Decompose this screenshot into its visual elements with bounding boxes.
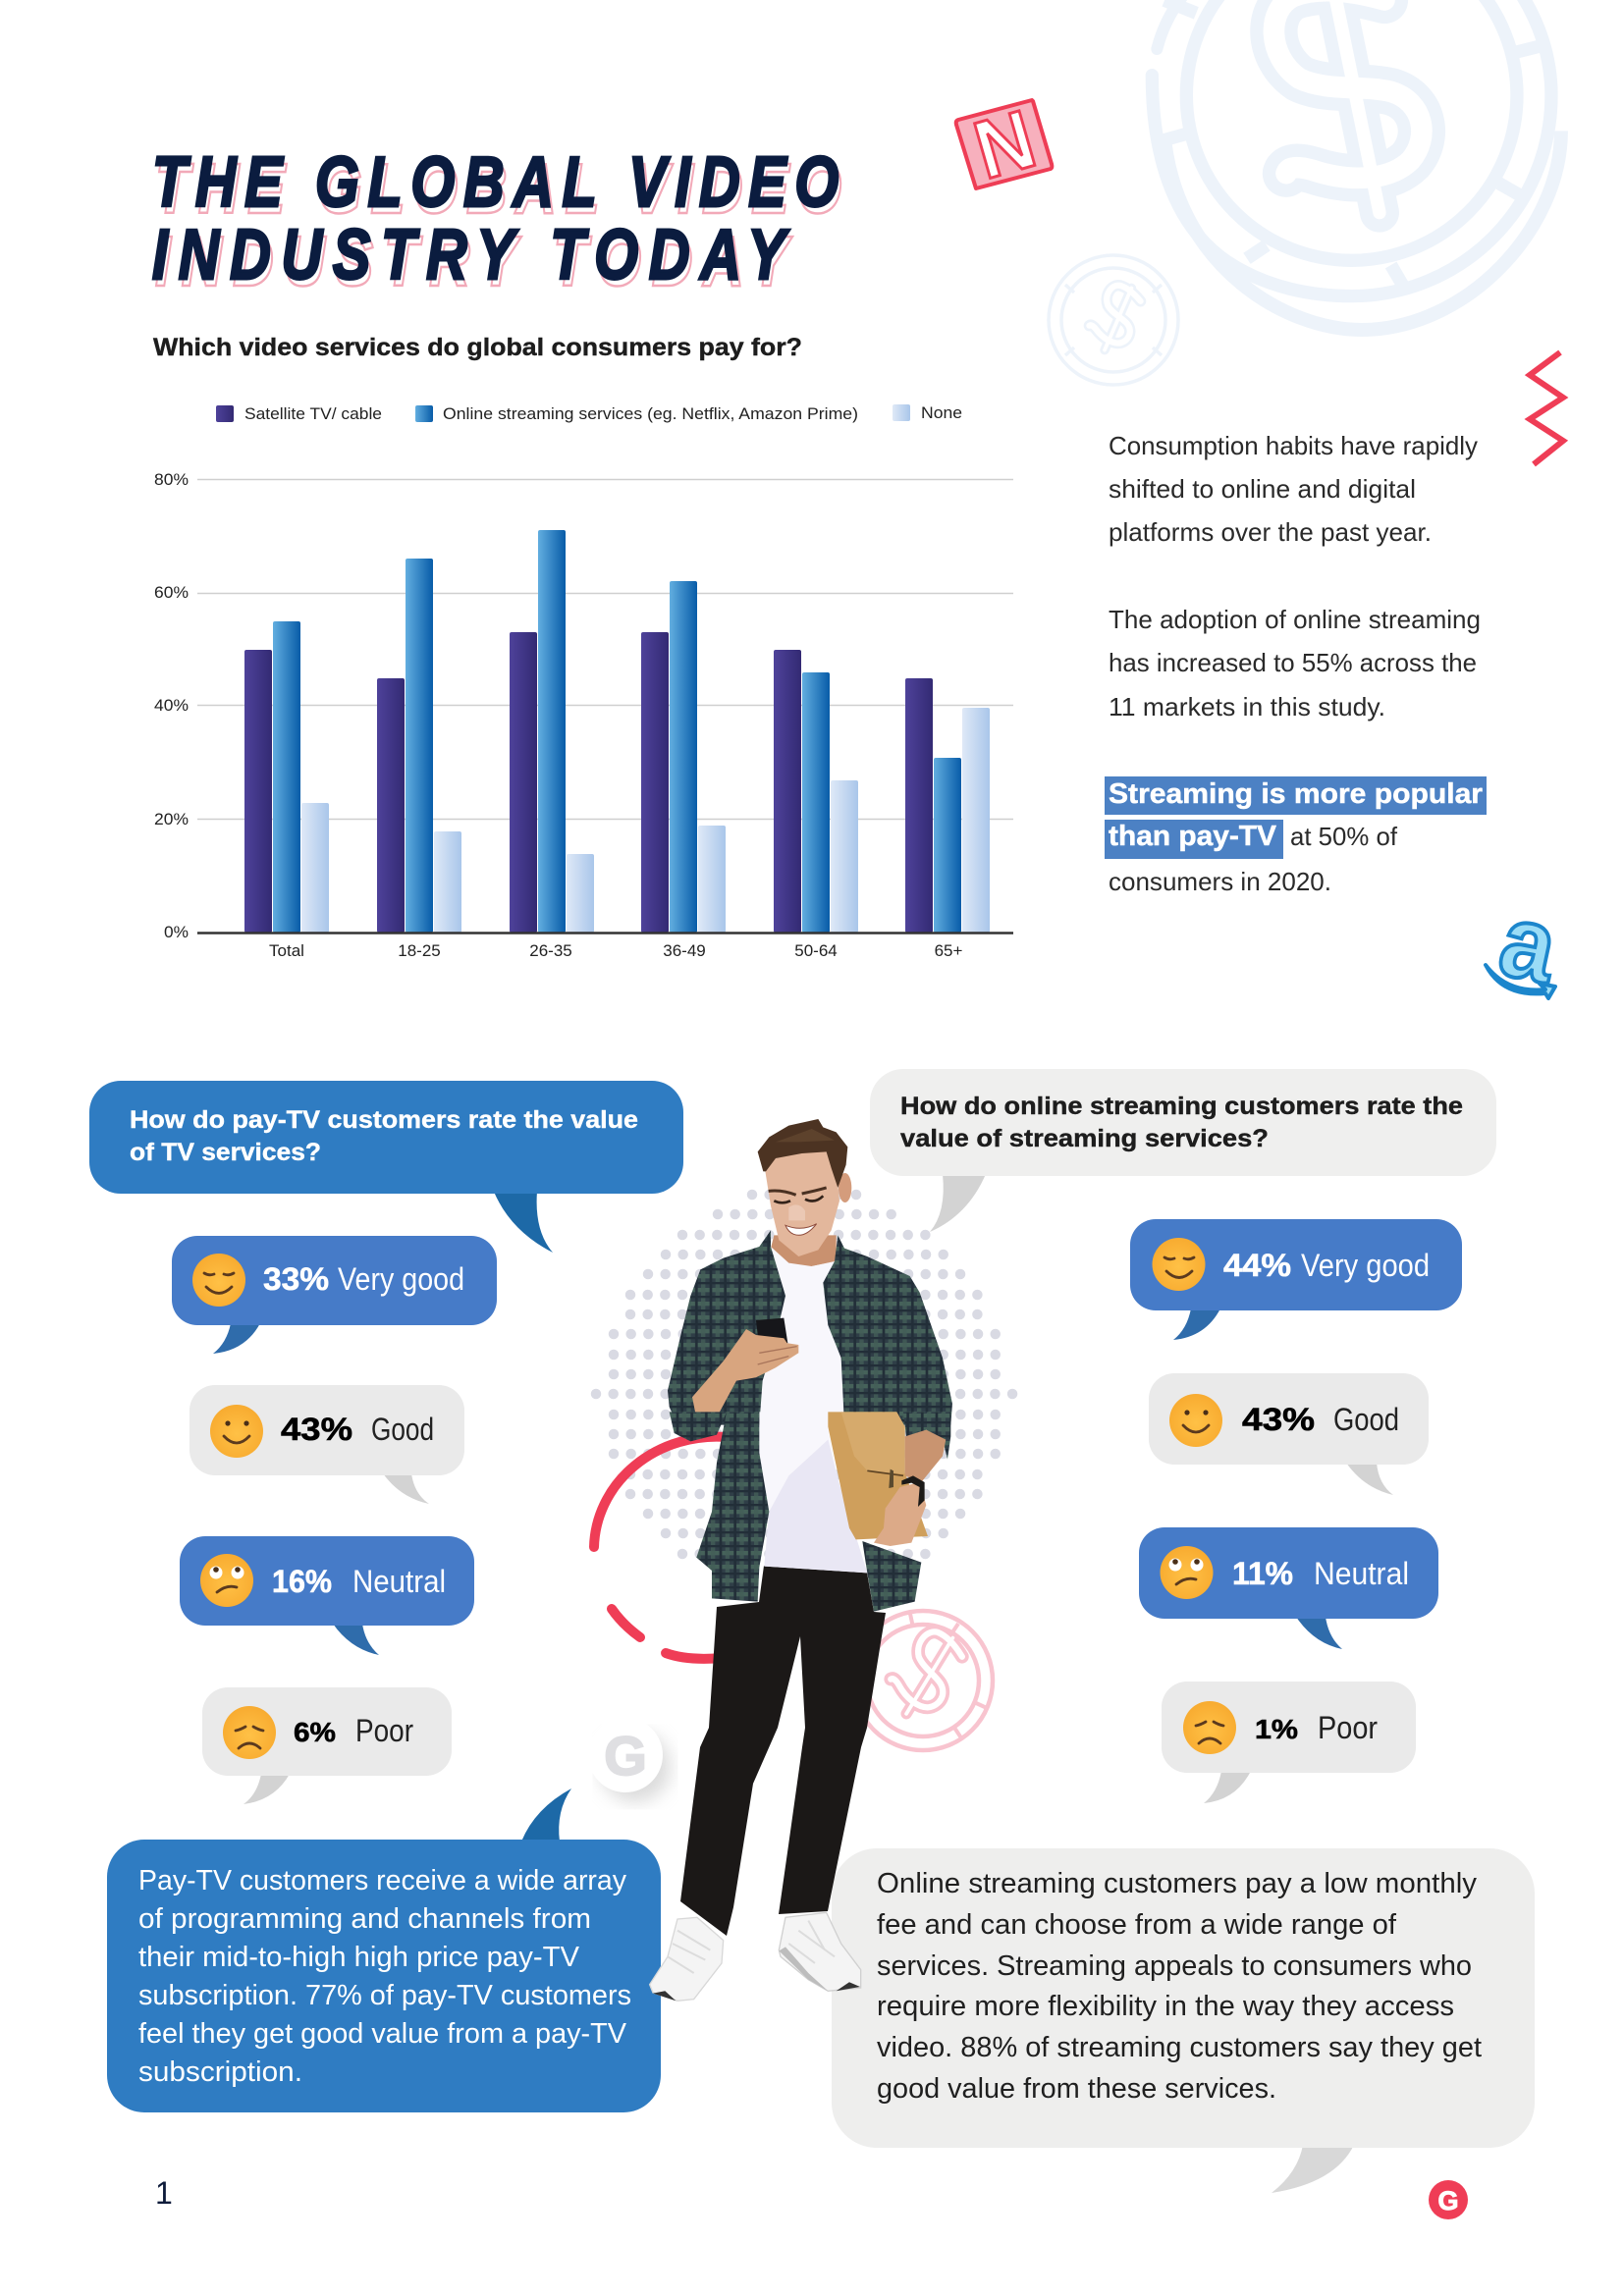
rating: streaming 44% very good: 44% xyxy=(1223,1248,1291,1283)
lower torso xyxy=(670,1412,950,1612)
bar chart: 65+ xyxy=(935,941,962,960)
t-shirt bottom xyxy=(759,1412,867,1573)
logo: red G: G xyxy=(1437,2186,1459,2216)
rating: pay-TV 43% good xyxy=(189,1385,464,1504)
rating: pay-TV 33% very good xyxy=(172,1236,497,1354)
G badge with shadow: G xyxy=(604,1725,647,1787)
bubble: streaming question: How do online streaming customers rate the xyxy=(900,1093,1463,1120)
text block: consumption habits xyxy=(1105,431,1487,896)
rating: streaming 1% poor: Poor xyxy=(1318,1710,1378,1745)
panel: streaming note: Online streaming customers pay a low monthly xyxy=(877,1868,1478,1899)
rating: pay-TV 33% very good: 33% xyxy=(263,1261,329,1297)
bubble: pay-TV question: of TV services? xyxy=(130,1139,321,1166)
rating: pay-TV 16% neutral: 16% xyxy=(272,1564,332,1599)
cuff left xyxy=(670,1412,727,1441)
panel: pay-TV note xyxy=(107,1789,661,2112)
bar chart: 0% xyxy=(164,923,189,941)
bar chart xyxy=(154,470,1013,960)
rating: pay-TV 33% very good: Very good xyxy=(338,1261,464,1297)
title: THE GLOBAL VIDEO xyxy=(152,142,839,221)
phone xyxy=(756,1318,787,1348)
panel: pay-TV note: subscription. 77% of pay-TV customers xyxy=(138,1980,631,2011)
rating: streaming 1% poor xyxy=(1162,1682,1416,1803)
legend: Satellite TV/ cable xyxy=(244,404,382,423)
panel: pay-TV note: of programming and channels from xyxy=(138,1903,591,1935)
person with phone and bag xyxy=(650,1119,952,2001)
rating: streaming 11% neutral: 11% xyxy=(1232,1556,1293,1591)
panel: pay-TV note: Pay-TV customers receive a wide array xyxy=(138,1865,626,1896)
text block: consumption habits: Streaming is more popular xyxy=(1109,778,1483,810)
title: THE GLOBAL VIDEO xyxy=(155,149,841,228)
text block: consumption habits: at 50% of xyxy=(1290,822,1398,851)
bar chart: 40% xyxy=(154,696,189,715)
icon: content emoji xyxy=(192,1254,245,1307)
legend xyxy=(216,403,962,423)
bar chart: 60% xyxy=(154,583,189,602)
rating: streaming 43% good: 43% xyxy=(1242,1402,1315,1437)
shirt right panel xyxy=(862,1541,921,1612)
text block: consumption habits: 11 markets in this study. xyxy=(1109,692,1385,721)
bar chart: 80% xyxy=(154,470,189,489)
bubble: streaming question xyxy=(870,1069,1496,1232)
rating: streaming 43% good: Good xyxy=(1333,1402,1399,1437)
rating: streaming 44% very good: Very good xyxy=(1301,1248,1430,1283)
bar chart: Total xyxy=(269,941,304,960)
rating: streaming 43% good xyxy=(1149,1373,1429,1495)
text block: consumption habits: The adoption of online streaming xyxy=(1109,605,1481,634)
icon: smile emoji xyxy=(210,1405,263,1458)
panel: pay-TV note: feel they get good value from a pay-TV xyxy=(138,2018,627,2050)
G badge with shadow xyxy=(588,1718,671,1802)
rating: pay-TV 6% poor: Poor xyxy=(355,1713,413,1748)
text block: consumption habits: shifted to online and digital xyxy=(1109,474,1416,504)
rating: streaming 11% neutral xyxy=(1139,1527,1438,1649)
panel: streaming note: fee and can choose from a wide range of xyxy=(877,1909,1397,1941)
panel: streaming note xyxy=(832,1848,1535,2193)
text block: consumption habits: consumers in 2020. xyxy=(1109,867,1331,896)
panel: pay-TV note: their mid-to-high high price pay-TV xyxy=(138,1942,580,1973)
hand right xyxy=(874,1482,926,1546)
red dashed circle xyxy=(594,1437,727,1659)
rating: streaming 1% poor: 1% xyxy=(1255,1714,1298,1744)
icon: Amazon: a xyxy=(1490,882,1568,1006)
rating: streaming 44% very good xyxy=(1130,1219,1462,1340)
bar chart: 26-35 xyxy=(529,941,572,960)
right sleeve xyxy=(903,1412,950,1460)
rating: pay-TV 43% good: Good xyxy=(371,1412,434,1447)
decorative coin top right xyxy=(1152,0,1561,330)
icon: sad emoji xyxy=(223,1706,276,1759)
logo: red G xyxy=(1429,2180,1468,2219)
bar chart: 36-49 xyxy=(663,941,706,960)
text block: consumption habits: has increased to 55% across the xyxy=(1109,648,1477,677)
bar chart: 20% xyxy=(154,810,189,828)
trousers xyxy=(680,1566,886,1936)
rating: pay-TV 16% neutral xyxy=(180,1536,474,1655)
shirt right xyxy=(823,1235,952,1425)
rating: pay-TV 43% good: 43% xyxy=(281,1412,352,1447)
bubble: pay-TV question: How do pay-TV customers rate the value xyxy=(130,1106,638,1134)
decorative small coin xyxy=(1049,255,1178,385)
hair xyxy=(758,1119,847,1188)
panel: streaming note: require more flexibility in the way they access xyxy=(877,1991,1454,2022)
icon: eye-roll emoji xyxy=(1161,1546,1214,1599)
neck xyxy=(771,1235,837,1266)
text block: consumption habits: than pay-TV xyxy=(1109,821,1277,852)
legend: None xyxy=(921,403,962,422)
forearm right xyxy=(905,1430,946,1482)
rating: streaming 11% neutral: Neutral xyxy=(1314,1556,1409,1591)
face xyxy=(764,1151,839,1256)
icon: smile emoji xyxy=(1169,1394,1222,1447)
title: INDUSTRY TODAY xyxy=(152,215,790,294)
title: INDUSTRY TODAY xyxy=(155,222,793,300)
icon: content emoji xyxy=(1153,1238,1206,1291)
shoes xyxy=(650,1912,861,2001)
shirt left panel xyxy=(696,1412,769,1602)
dot pattern behind person xyxy=(596,1195,1015,1554)
bag xyxy=(828,1412,928,1539)
upper body xyxy=(668,1119,952,1425)
text block: consumption habits: Consumption habits have rapidly xyxy=(1109,431,1478,460)
bar chart: 18-25 xyxy=(398,941,441,960)
legend: Online streaming services (eg. Netflix, Amazon Prime) xyxy=(443,404,858,423)
bubble: streaming question: value of streaming services? xyxy=(900,1125,1269,1152)
panel: streaming note: video. 88% of streaming customers say they get xyxy=(877,2032,1482,2063)
bar chart: 50-64 xyxy=(794,941,838,960)
panel: pay-TV note: subscription. xyxy=(138,2056,302,2088)
panel: streaming note: services. Streaming appeals to consumers who xyxy=(877,1950,1472,1982)
chart heading: Which video services do global consumers pay for? xyxy=(153,334,802,361)
icon: eye-roll emoji xyxy=(200,1554,253,1607)
rating: pay-TV 16% neutral: Neutral xyxy=(352,1564,446,1599)
title xyxy=(152,142,841,300)
rating: pay-TV 6% poor xyxy=(202,1687,452,1804)
forearm and hand xyxy=(692,1329,798,1423)
icon: sad emoji xyxy=(1183,1701,1236,1754)
panel: streaming note: good value from these services. xyxy=(877,2073,1276,2105)
bubble: pay-TV question xyxy=(89,1081,683,1253)
page number: 1 xyxy=(155,2175,173,2211)
icon: Netflix tile: N xyxy=(964,92,1045,196)
text block: consumption habits: platforms over the past year. xyxy=(1109,517,1432,547)
rating: pay-TV 6% poor: 6% xyxy=(294,1717,336,1747)
shirt left xyxy=(668,1230,785,1425)
ear xyxy=(839,1173,851,1202)
pink coin xyxy=(853,1611,993,1750)
watch xyxy=(901,1475,925,1507)
t-shirt top xyxy=(759,1247,844,1425)
zigzag accent xyxy=(1530,352,1563,464)
